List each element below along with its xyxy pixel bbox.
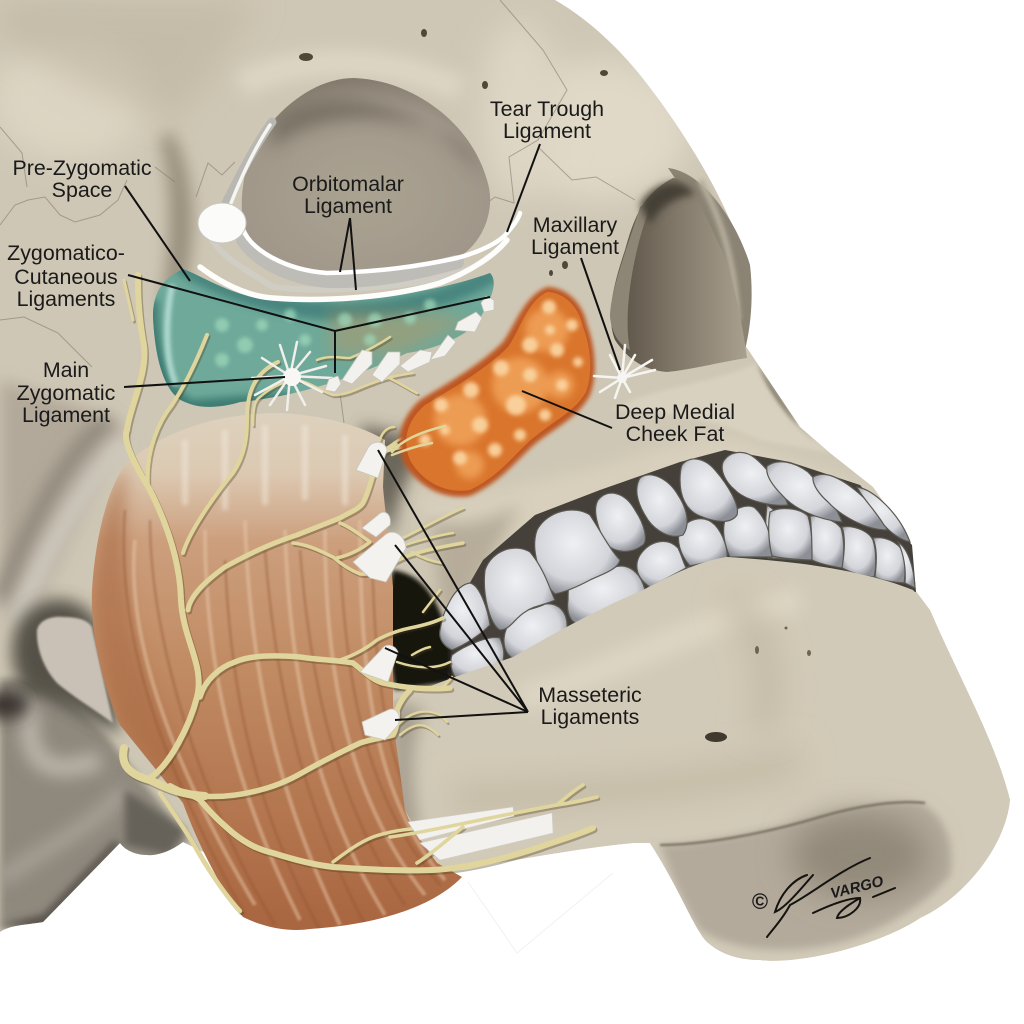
label: Masseteric Ligaments: Ligaments <box>541 705 639 729</box>
eye socket <box>242 78 490 271</box>
mandible <box>393 557 1010 961</box>
forehead light <box>550 58 688 202</box>
deep medial cheek fat <box>392 287 595 497</box>
leader lines <box>124 144 620 720</box>
label: Maxillary Ligament: Maxillary <box>533 213 617 237</box>
mandibular nerve overlay <box>390 785 597 870</box>
label: Zygomatico-Cutaneous Ligaments: Ligaments <box>17 287 115 311</box>
suture lines <box>0 0 635 423</box>
label: Orbitomalar Ligament: Ligament <box>304 194 392 218</box>
label: Deep Medial Cheek Fat: Cheek Fat <box>626 422 724 446</box>
label: Tear Trough Ligament: Ligament <box>503 119 591 143</box>
gum gap <box>437 450 916 682</box>
label: Masseteric Ligaments: Masseteric <box>538 683 642 707</box>
masseteric ligaments <box>353 442 406 740</box>
facial nerve shadow <box>125 277 598 913</box>
faint outline below jaw <box>468 873 613 953</box>
label: Deep Medial Cheek Fat: Deep Medial <box>615 400 735 424</box>
dark ring around ear <box>12 599 120 735</box>
label: Main Zygomatic Ligament: Ligament <box>22 403 110 427</box>
ear <box>37 617 113 723</box>
label: Main Zygomatic Ligament: Zygomatic <box>17 381 116 405</box>
zygomatic ligament chain <box>252 296 494 410</box>
label: Zygomatico-Cutaneous Ligaments: Zygomatico- <box>7 241 125 265</box>
jaw pits <box>755 626 811 656</box>
teeth <box>388 450 916 690</box>
nasal spine ridge <box>622 366 822 449</box>
facial nerve branches <box>123 275 597 911</box>
copyright signature: © <box>752 889 768 914</box>
mandibular ligaments <box>408 807 553 860</box>
copyright signature <box>752 858 895 937</box>
maxillary ligament <box>594 345 655 398</box>
lower occipital grey <box>0 678 190 930</box>
label: Zygomatico-Cutaneous Ligaments: Cutaneous <box>14 265 118 289</box>
label: Main Zygomatic Ligament: Main <box>43 358 89 382</box>
skull pits <box>299 29 608 276</box>
copyright signature: VARGO <box>829 873 885 902</box>
label: Orbitomalar Ligament: Orbitomalar <box>292 172 404 196</box>
cheek and maxilla shading <box>360 425 430 540</box>
nasal aperture <box>610 168 752 372</box>
label: Tear Trough Ligament: Tear Trough <box>490 97 604 121</box>
left temporal grey <box>0 380 125 620</box>
label: Pre-Zygomatic Space: Space <box>52 178 112 202</box>
pre-zygomatic space <box>153 269 494 407</box>
orbitomalar ligament <box>198 122 520 299</box>
temple shadow <box>160 130 192 310</box>
label: Pre-Zygomatic Space: Pre-Zygomatic <box>12 156 152 180</box>
label: Maxillary Ligament: Ligament <box>531 235 619 259</box>
mental foramen <box>705 732 727 742</box>
masseter muscle <box>85 410 470 935</box>
